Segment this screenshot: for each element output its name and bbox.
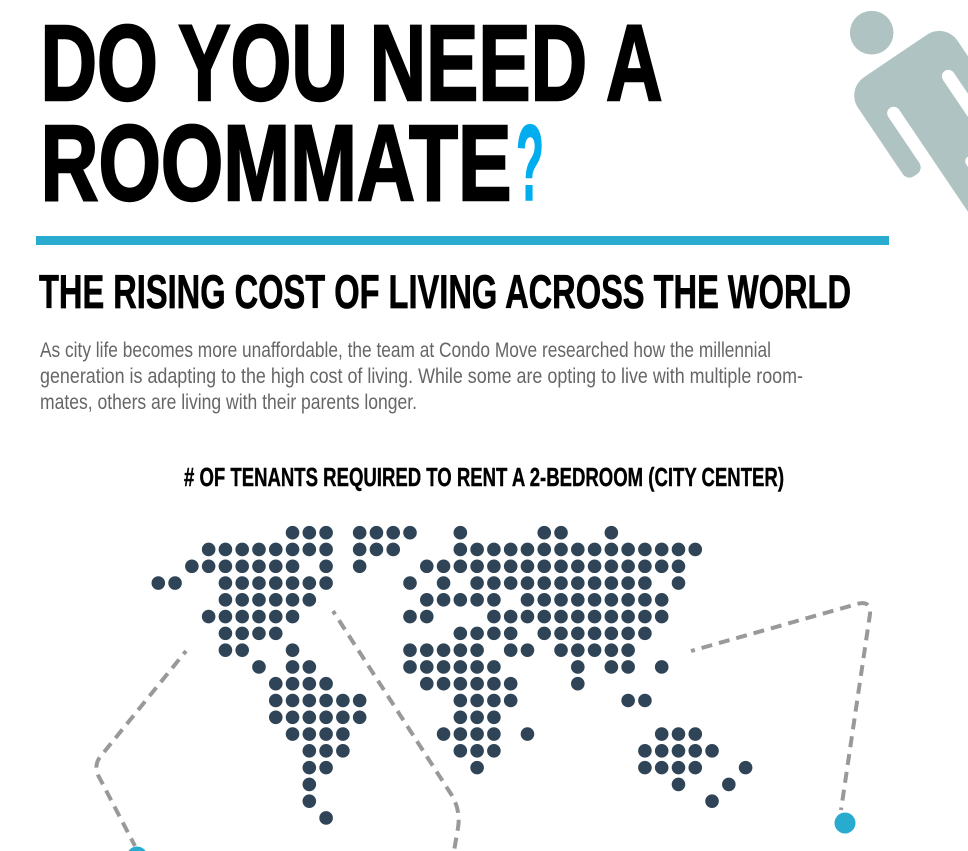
map: oceania <box>645 734 746 801</box>
icon: person <box>846 11 968 441</box>
map: north america <box>158 533 410 667</box>
dashed connector: middle <box>333 611 459 851</box>
intro text: mates, others are living with their parents longer. <box>40 391 417 414</box>
dashed connector: left <box>96 651 186 846</box>
marker: right <box>834 812 856 834</box>
map: south america <box>276 684 360 818</box>
title <box>40 2 662 223</box>
dashed connector: right <box>691 603 870 810</box>
title: ROOMMATE <box>40 102 512 223</box>
intro text: generation is adapting to the high cost of living. While some are opting to live with multiple room- <box>40 365 803 388</box>
intro text <box>40 339 803 414</box>
map: eurasia and africa <box>410 533 695 768</box>
title: ? <box>516 102 544 223</box>
rule <box>36 236 889 245</box>
intro text: As city life becomes more unaffordable, the team at Condo Move researched how the millennial <box>40 339 771 362</box>
marker: left <box>126 846 148 851</box>
dot map: world <box>158 533 746 818</box>
title: DO YOU NEED A <box>40 2 662 123</box>
